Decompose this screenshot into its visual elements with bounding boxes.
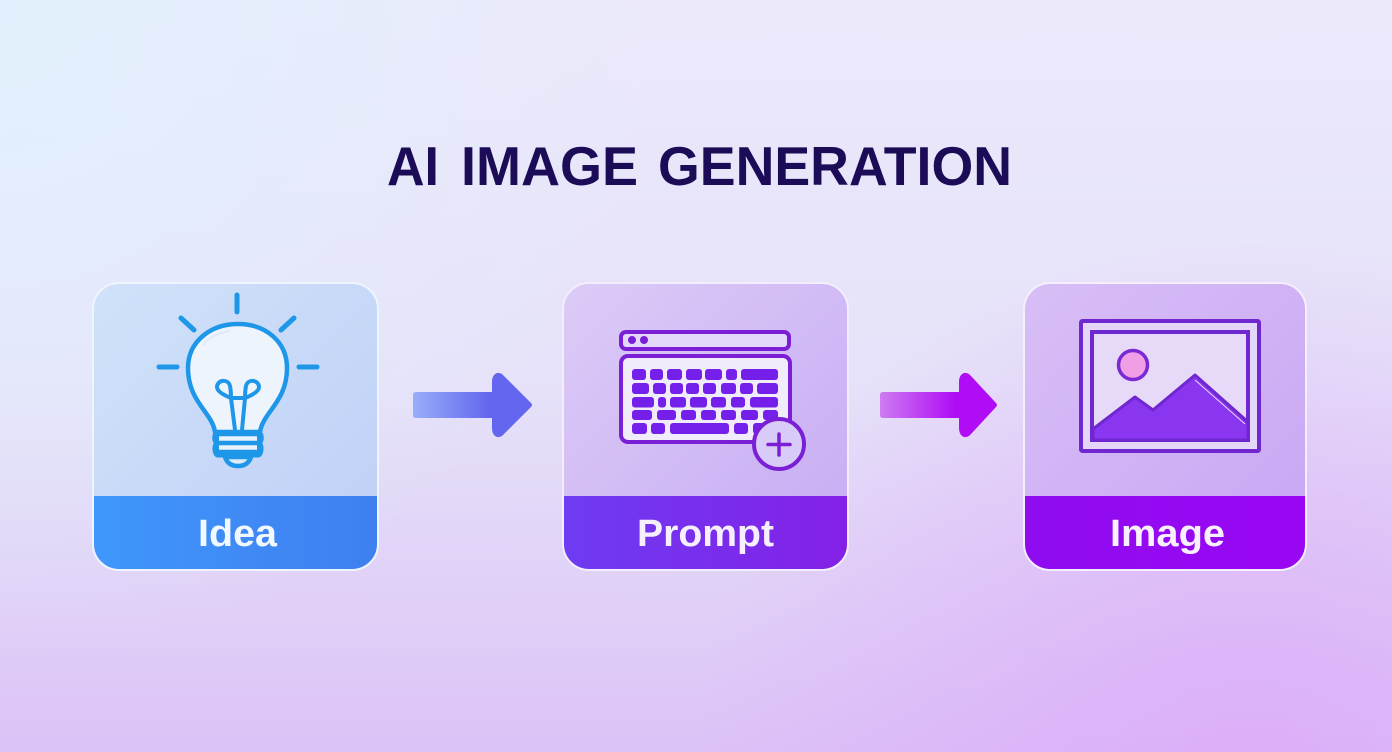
label band: idea: Idea (198, 513, 278, 555)
panel border: prompt (563, 283, 848, 570)
keys (632, 369, 778, 434)
mountain highlight (1195, 380, 1245, 424)
outer frame (1081, 321, 1259, 451)
panel: image (1024, 283, 1306, 570)
label band: image: Image (1110, 513, 1225, 555)
browser bar (621, 332, 789, 349)
label band: image (1024, 496, 1306, 570)
title (387, 135, 1012, 197)
arrow: prompt to image (880, 373, 997, 437)
label band: idea (93, 496, 378, 570)
arrow: idea to prompt (413, 373, 532, 437)
sun (1118, 350, 1148, 380)
title: IMAGE (461, 135, 638, 197)
label band: prompt: Prompt (637, 513, 774, 555)
panel: prompt (563, 283, 848, 570)
plus badge (754, 419, 804, 469)
icon: keyboard with plus (621, 332, 804, 469)
icon: framed picture (1081, 321, 1259, 451)
title: GENERATION (658, 135, 1012, 197)
mountains (1093, 375, 1248, 440)
panel border: image (1024, 283, 1306, 570)
panel border: idea (93, 283, 378, 570)
keyboard body (621, 356, 790, 442)
panel: idea (93, 283, 378, 570)
inner picture (1092, 332, 1248, 440)
title: AI (387, 135, 439, 197)
label band: prompt (563, 496, 848, 570)
icon: light bulb (159, 295, 317, 466)
